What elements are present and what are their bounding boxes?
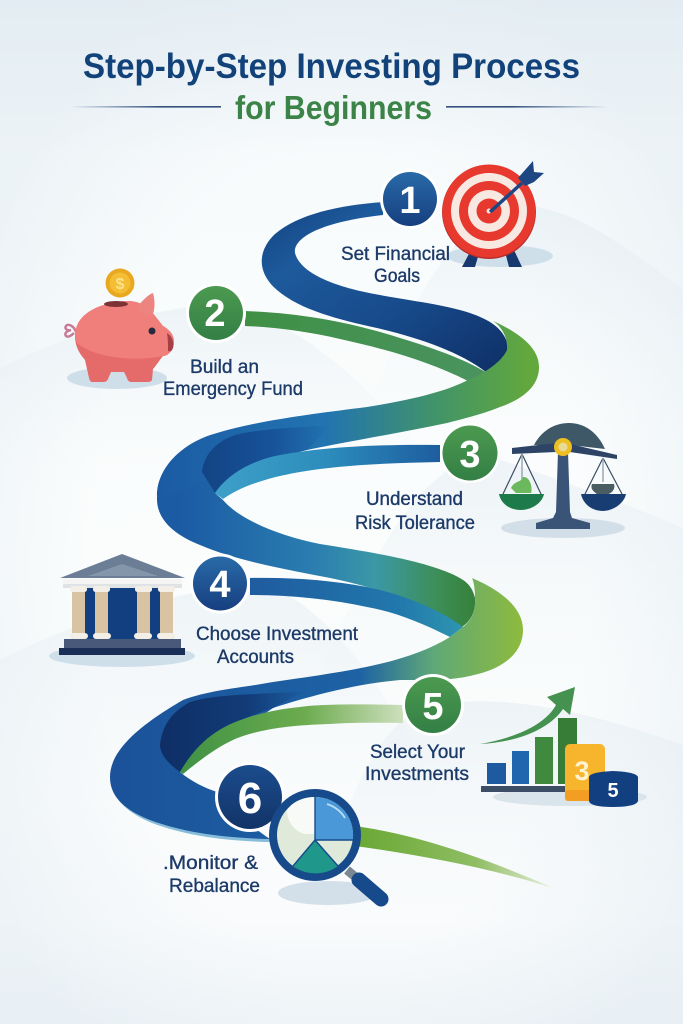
step 6 badge: 6 xyxy=(238,774,262,823)
ribbon segment: back shade of third curve xyxy=(160,691,305,772)
ribbon segment: green band to step 2 xyxy=(245,311,487,381)
step 2 label xyxy=(163,357,303,400)
step 2 badge: 2 xyxy=(204,293,226,335)
icon: bank building xyxy=(49,554,195,667)
step 2 badge xyxy=(186,283,246,343)
title xyxy=(83,47,580,126)
icon: balance scale xyxy=(499,423,626,538)
step 2 label: Build an xyxy=(190,357,259,378)
step 4 badge xyxy=(190,554,250,614)
step 5 label xyxy=(365,742,469,785)
step 6 label xyxy=(163,853,260,897)
heading: subtitle: for Beginners xyxy=(235,89,432,126)
step 5 label: Select Your xyxy=(370,742,466,763)
ribbon segment: green band to step 5 xyxy=(180,704,403,774)
step 3 badge xyxy=(440,423,500,483)
step 5 badge: 5 xyxy=(422,686,444,728)
step 1 label: Goals xyxy=(374,266,420,287)
step 4 badge: 4 xyxy=(209,564,231,606)
step 1 badge: 1 xyxy=(399,180,421,222)
ribbon segment: green tail xyxy=(355,826,553,888)
icon: bar chart with growth arrow and stacked blocks: 3 xyxy=(574,756,590,786)
icon: piggy bank: $ xyxy=(116,276,125,293)
step 3 badge: 3 xyxy=(459,434,481,476)
ribbon segment: dark blue band from step 1 xyxy=(262,202,508,372)
step 3 label xyxy=(355,489,475,534)
step 1 label: Set Financial xyxy=(341,244,450,265)
ribbon segment: light blue band to step 3 xyxy=(215,445,440,499)
step 4 label: Accounts xyxy=(217,647,294,668)
step 3 label: Understand xyxy=(366,489,463,510)
icon: piggy bank xyxy=(65,268,174,389)
step 5 badge xyxy=(402,674,464,736)
step 6 label: .Monitor & xyxy=(163,853,258,874)
heading: main title: Step-by-Step Investing Process xyxy=(83,47,580,86)
step 6 badge xyxy=(215,762,285,832)
step 4 label: Choose Investment xyxy=(196,624,359,645)
ribbon segment: green to blue lower bulge and sweep to step 6 xyxy=(110,578,523,839)
ribbon segment: back shade of second curve xyxy=(202,425,330,493)
ribbon segment: pale underside edge of lower sweep xyxy=(111,775,270,842)
step 3 label: Risk Tolerance xyxy=(355,513,475,534)
step 5 label: Investments xyxy=(365,764,469,785)
step 1 badge xyxy=(380,169,440,229)
step 2 label: Emergency Fund xyxy=(163,379,303,400)
icon: bar chart with growth arrow and stacked blocks: 5 xyxy=(607,780,619,802)
ribbon segment: blue band to step 4 xyxy=(250,578,463,637)
step 6 label: Rebalance xyxy=(169,876,260,897)
spiral ribbon xyxy=(110,202,553,888)
ribbon segment: green to blue upper bulge xyxy=(157,321,539,497)
icon: target with arrow xyxy=(442,161,553,267)
step 4 label xyxy=(196,624,359,668)
icon: bar chart with growth arrow and stacked blocks xyxy=(480,687,647,807)
icon: magnifying glass over pie chart xyxy=(269,789,381,905)
ribbon segment: blue to green diagonal xyxy=(157,478,475,627)
step 1 label xyxy=(341,244,450,287)
